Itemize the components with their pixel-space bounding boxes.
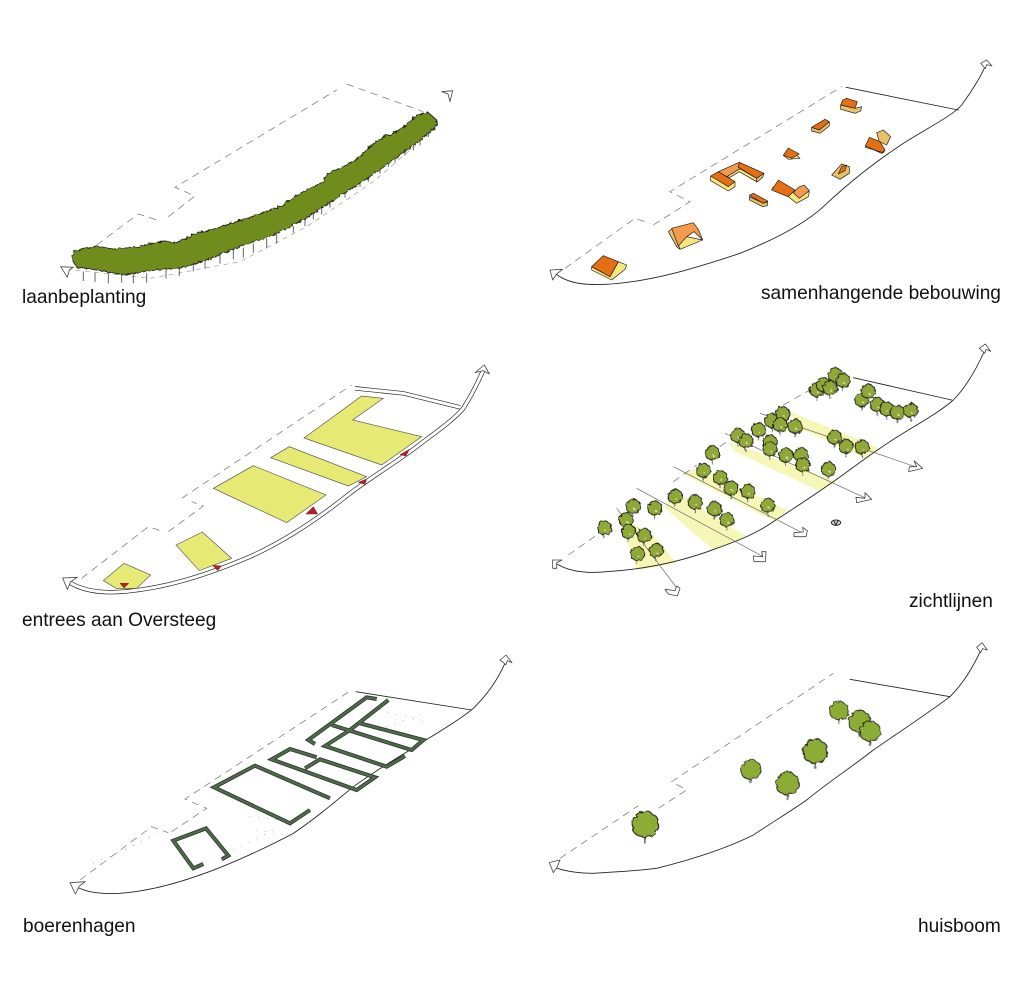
label: samenhangende bebouwing: samenhangende bebouwing (761, 283, 1001, 304)
canopy (72, 113, 437, 275)
stippling (93, 710, 423, 863)
viewer icon (831, 520, 841, 525)
plan outline and avenue of trees (61, 84, 453, 283)
trees (632, 701, 881, 843)
tree trunks (83, 126, 435, 283)
plan, sightlines and trees (553, 344, 991, 596)
panel: entrees aan Oversteeg (22, 365, 489, 631)
plan, fields and road (63, 365, 489, 592)
plan outline and road (550, 60, 992, 285)
panel: zichtlijnen (553, 344, 993, 612)
panel: boerenhagen (23, 655, 512, 937)
panel: samenhangende bebouwing (550, 60, 1001, 304)
sightlines (617, 413, 920, 590)
trees (597, 368, 918, 565)
label: entrees aan Oversteeg: entrees aan Oversteeg (22, 610, 216, 631)
road (68, 370, 483, 592)
fields (103, 563, 151, 589)
label: boerenhagen: boerenhagen (23, 916, 136, 937)
hedges (173, 697, 423, 868)
plan and house trees (549, 643, 987, 873)
entrance markers (120, 449, 409, 588)
label: huisboom: huisboom (918, 916, 1001, 937)
panel: huisboom (549, 643, 1001, 937)
sight bands (620, 412, 880, 570)
panel: laanbeplanting (22, 84, 453, 308)
label: zichtlijnen: zichtlijnen (909, 591, 993, 612)
buildings (592, 98, 891, 280)
label: laanbeplanting: laanbeplanting (22, 287, 146, 308)
plan and hedges (70, 655, 512, 894)
